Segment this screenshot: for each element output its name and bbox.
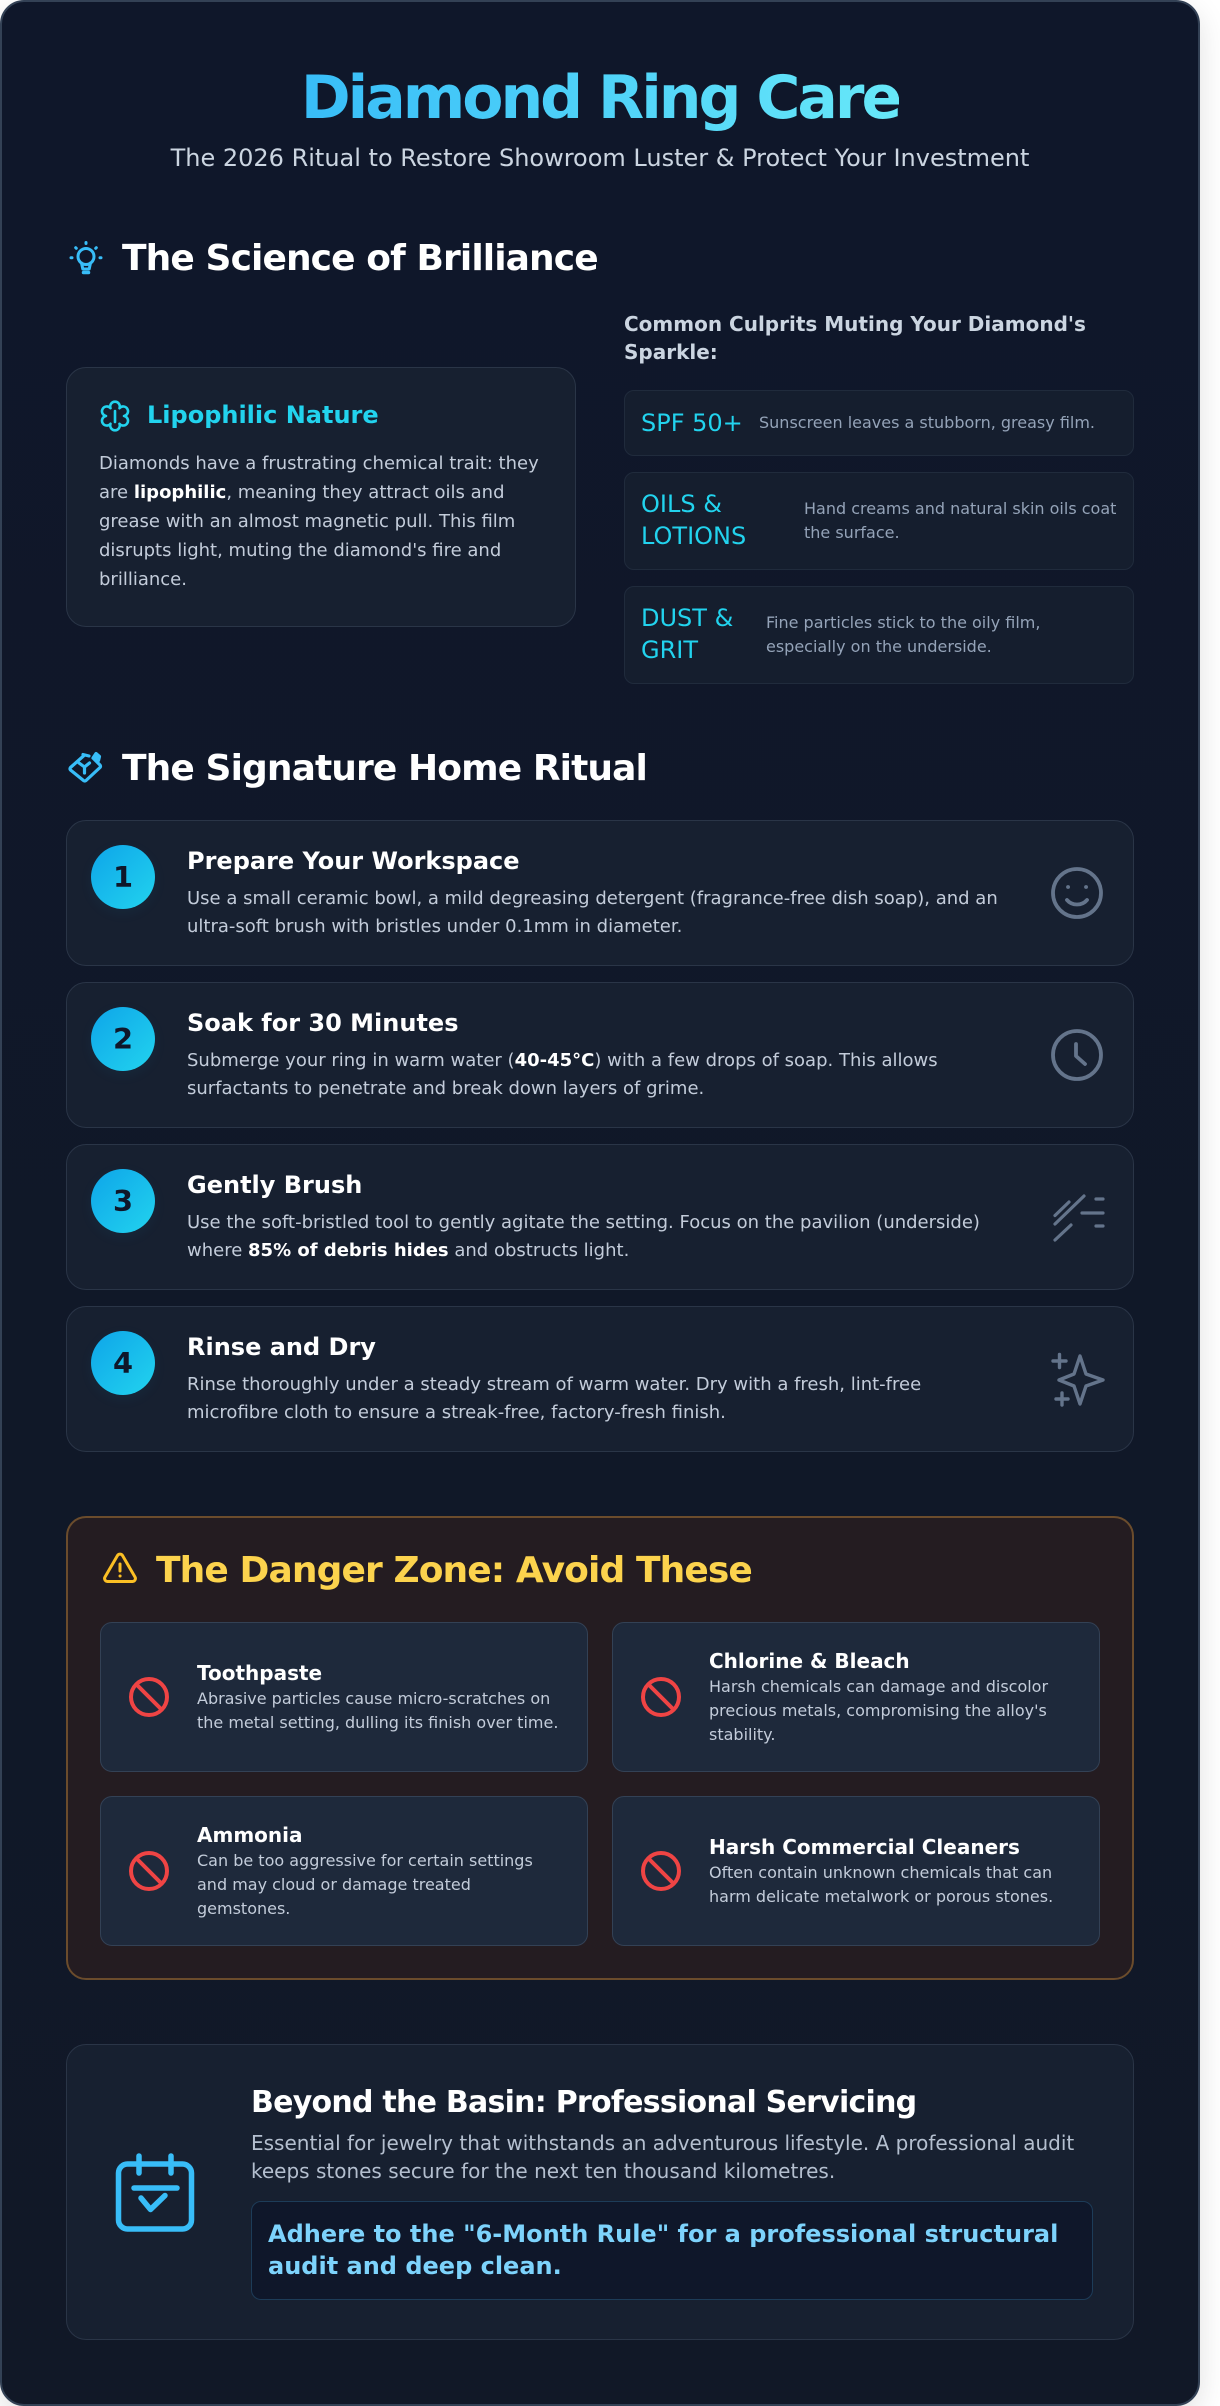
- danger: chlorine: stability.: [709, 1725, 775, 1744]
- step text: Use a small ceramic bowl, a mild degreasing detergent (fragrance-free dish soap), and an: [187, 888, 998, 909]
- step text: [187, 888, 998, 937]
- culprit: dust and grit: Fine particles stick to the oily film,: [766, 613, 1040, 632]
- card body: Diamonds have a frustrating chemical trait: they: [99, 453, 539, 474]
- step text: Use the soft-bristled tool to gently agitate the setting. Focus on the pavilion (underside): [187, 1212, 980, 1233]
- icon: calendar check: [116, 2153, 194, 2232]
- step number: [91, 1007, 155, 1071]
- step text: Rinse thoroughly under a steady stream of warm water. Dry with a fresh, lint-free: [187, 1374, 921, 1395]
- title: Diamond Ring Care: [301, 63, 899, 133]
- culprits heading: Sparkle:: [624, 340, 718, 364]
- danger: toothpaste: Toothpaste: [197, 1661, 322, 1685]
- culprit: dust and grit: DUST &: [641, 604, 733, 632]
- callout: audit and deep clean.: [268, 2252, 562, 2280]
- step text: Submerge your ring in warm water (40-45°C) with a few drops of soap. This allows: [187, 1050, 938, 1071]
- danger: chlorine: Chlorine & Bleach: [709, 1649, 910, 1673]
- step 1: [66, 820, 1134, 966]
- step number: [91, 1169, 155, 1233]
- step number: 3: [113, 1184, 133, 1218]
- callout: [251, 2201, 1093, 2300]
- danger: toothpaste: the metal setting, dulling its finish over time.: [197, 1713, 558, 1732]
- danger: chlorine: [612, 1622, 1100, 1772]
- danger: ammonia: [100, 1796, 588, 1946]
- panel: lipophilic nature: [66, 367, 576, 627]
- danger heading: The Danger Zone: Avoid These: [156, 1550, 752, 1590]
- service title: Beyond the Basin: Professional Servicing: [251, 2085, 916, 2120]
- heading: ritual: The Signature Home Ritual: [122, 748, 647, 788]
- danger: harsh cleaners: [612, 1796, 1100, 1946]
- danger: ammonia: Can be too aggressive for certain settings: [197, 1851, 533, 1870]
- icon: brush strokes: [1053, 1194, 1105, 1242]
- step title: Soak for 30 Minutes: [187, 1009, 458, 1037]
- danger: harsh cleaners: Often contain unknown chemicals that can: [709, 1863, 1052, 1882]
- step title: Prepare Your Workspace: [187, 847, 520, 875]
- culprits heading: [624, 312, 1086, 364]
- step number: 4: [113, 1346, 133, 1380]
- icon: smile: [1051, 867, 1103, 919]
- step text: [187, 1212, 980, 1261]
- danger: harsh cleaners: harm delicate metalwork or porous stones.: [709, 1887, 1053, 1906]
- callout: Adhere to the "6-Month Rule" for a professional structural: [268, 2220, 1058, 2248]
- danger: ammonia: gemstones.: [197, 1899, 290, 1918]
- icon: lipophilic molecule: [100, 400, 130, 432]
- culprit: oils and lotions: Hand creams and natural skin oils coat: [804, 498, 1116, 518]
- culprit: oils and lotions: LOTIONS: [641, 522, 746, 550]
- icon: warning: [103, 1552, 137, 1583]
- culprit: dust and grit: especially on the underside.: [766, 637, 992, 656]
- subtitle: The 2026 Ritual to Restore Showroom Luster & Protect Your Investment: [171, 144, 1029, 172]
- step 3: [66, 1144, 1134, 1290]
- step number: [91, 845, 155, 909]
- step text: [187, 1374, 921, 1423]
- step number: 2: [113, 1022, 133, 1056]
- culprit: SPF 50+: [624, 390, 1134, 456]
- icon: clock: [1051, 1029, 1103, 1081]
- culprit: oils and lotions: OILS &: [641, 490, 722, 518]
- culprit: dust and grit: GRIT: [641, 636, 698, 664]
- step text: [187, 1050, 938, 1099]
- culprit: SPF 50+: SPF 50+: [641, 409, 743, 437]
- service text: keeps stones secure for the next ten thousand kilometres.: [251, 2159, 835, 2183]
- danger: toothpaste: Abrasive particles cause micro-scratches on: [197, 1689, 550, 1708]
- danger: ammonia: Ammonia: [197, 1823, 302, 1847]
- step text: where 85% of debris hides and obstructs light.: [187, 1240, 629, 1261]
- step title: Gently Brush: [187, 1171, 362, 1199]
- heading: science: The Science of Brilliance: [122, 238, 598, 278]
- step title: Rinse and Dry: [187, 1333, 376, 1361]
- danger: toothpaste: [100, 1622, 588, 1772]
- step 2: [66, 982, 1134, 1128]
- step text: ultra-soft brush with bristles under 0.1mm in diameter.: [187, 916, 682, 937]
- step 4: [66, 1306, 1134, 1452]
- step text: microfibre cloth to ensure a streak-free, factory-fresh finish.: [187, 1402, 726, 1423]
- icon: light bulb: [70, 241, 102, 274]
- danger: harsh cleaners: Harsh Commercial Cleaners: [709, 1835, 1020, 1859]
- card body: grease with an almost magnetic pull. This film: [99, 511, 515, 532]
- card heading: Lipophilic Nature: [147, 401, 379, 429]
- service text: Essential for jewelry that withstands an adventurous lifestyle. A professional audit: [251, 2130, 1074, 2154]
- culprit: oils and lotions: the surface.: [804, 522, 900, 542]
- culprit: oils and lotions: [624, 472, 1134, 570]
- service text: [251, 2130, 1074, 2183]
- icon: diamond: [68, 752, 102, 783]
- culprit: dust and grit: [624, 586, 1134, 684]
- danger: chlorine: precious metals, compromising the alloy's: [709, 1701, 1047, 1720]
- danger: chlorine: Harsh chemicals can damage and discolor: [709, 1677, 1048, 1696]
- icon: sparkle: [1051, 1352, 1105, 1407]
- step number: [91, 1331, 155, 1395]
- step number: 1: [113, 860, 133, 894]
- panel: professional servicing: [66, 2044, 1134, 2340]
- culprit: SPF 50+: Sunscreen leaves a stubborn, greasy film.: [759, 413, 1095, 432]
- card body: [99, 453, 539, 590]
- culprits heading: Common Culprits Muting Your Diamond's: [624, 312, 1086, 336]
- card body: brilliance.: [99, 569, 187, 590]
- card body: are lipophilic, meaning they attract oils and: [99, 482, 505, 503]
- card body: disrupts light, muting the diamond's fire and: [99, 540, 501, 561]
- panel: danger zone: [66, 1516, 1134, 1980]
- step text: surfactants to penetrate and break down layers of grime.: [187, 1078, 704, 1099]
- danger: ammonia: and may cloud or damage treated: [197, 1875, 471, 1894]
